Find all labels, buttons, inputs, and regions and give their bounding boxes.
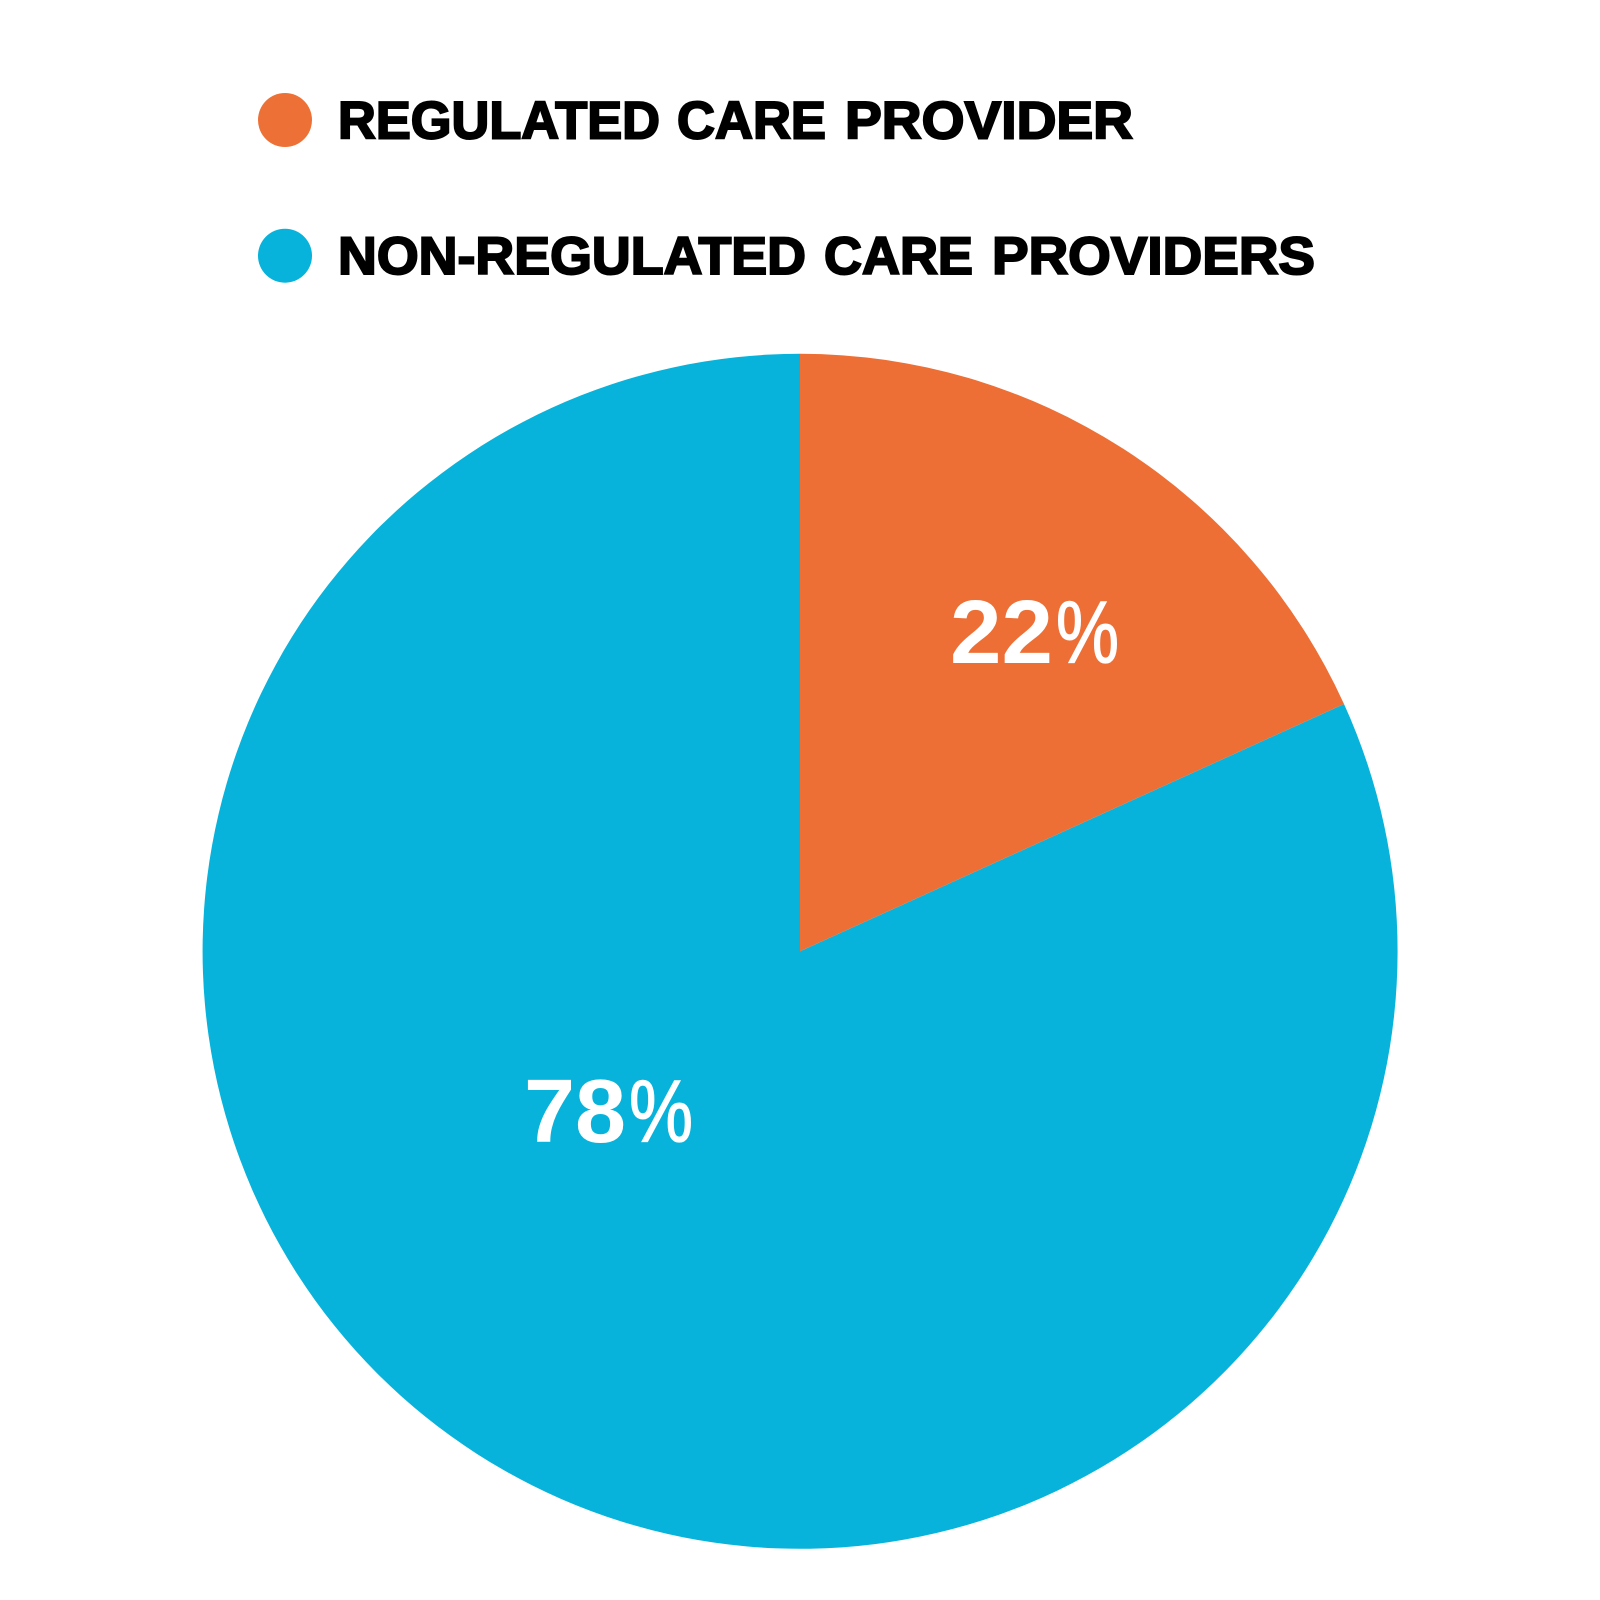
legend xyxy=(258,91,1315,286)
pie slice: regulated 22% xyxy=(800,354,1344,951)
legend item: regulated care provider xyxy=(258,91,1133,150)
legend label: regulated care provider: CARE xyxy=(677,91,826,150)
legend label: regulated care provider xyxy=(338,91,1133,150)
legend label: regulated care provider: PROVIDER xyxy=(845,91,1133,150)
legend swatch: blue xyxy=(258,229,312,283)
legend label: non-regulated care providers: CARE xyxy=(824,227,973,286)
value label: 78%: 78 xyxy=(524,1062,626,1162)
legend item: non-regulated care providers xyxy=(258,227,1315,286)
value label: 22% xyxy=(950,582,1119,683)
legend label: non-regulated care providers xyxy=(338,227,1315,286)
pie slice: non-regulated 78% xyxy=(203,354,1398,1549)
legend label: regulated care provider: REGULATED xyxy=(338,91,660,150)
value label: 22%: % xyxy=(1056,582,1119,682)
legend label: non-regulated care providers: NON-REGULATED xyxy=(338,227,806,286)
legend label: non-regulated care providers: PROVIDERS xyxy=(992,227,1315,286)
pie chart xyxy=(203,354,1398,1549)
value label: 78%: % xyxy=(629,1062,693,1160)
legend swatch: orange xyxy=(258,93,312,147)
value label: 22%: 22 xyxy=(950,583,1053,683)
value label: 78% xyxy=(524,1062,693,1162)
